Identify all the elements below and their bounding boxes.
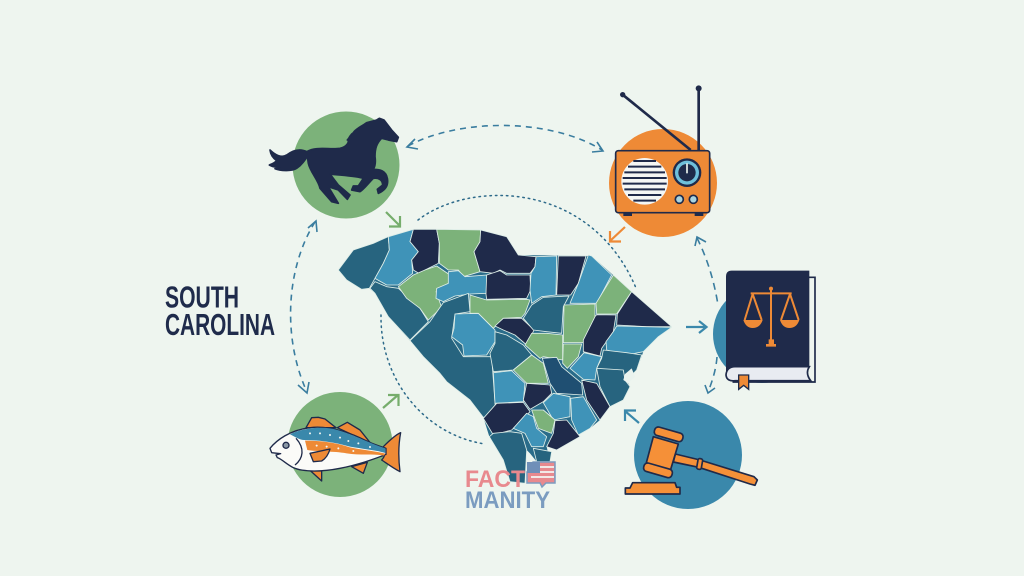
arrow: book to gavel: [705, 357, 717, 393]
dashed cycle arrows: [291, 125, 718, 393]
map: South Carolina counties: [338, 229, 672, 483]
icon: fish on green circle: [270, 392, 401, 497]
dotted ring around the map: [381, 195, 636, 444]
arrow: horse to radio: [407, 125, 603, 152]
icon: law book with scales on blue circle: [713, 271, 815, 389]
logo: Fact Manity watermark: [465, 462, 555, 514]
logo: Fact Manity watermark: FACT: [465, 466, 525, 493]
arrow: map to book: [686, 321, 706, 333]
logo: Fact Manity watermark: MANITY: [465, 487, 550, 514]
icon: horse in green circle: [269, 112, 400, 218]
arrow: radio to map: [610, 227, 625, 242]
title: South Carolina: [165, 280, 275, 342]
arrow: book to radio: [695, 237, 718, 305]
title: South Carolina: CAROLINA: [165, 308, 275, 342]
arrow: horse to map: [386, 212, 400, 226]
icon: radio on orange circle: [609, 85, 717, 237]
arrow: fish to horse: [291, 221, 317, 393]
logo flag bubble: [527, 462, 555, 487]
arrow: gavel to map: [625, 410, 639, 423]
icon: gavel on blue circle: [625, 401, 757, 509]
arrow: map to fish: [383, 395, 398, 408]
title: South Carolina: SOUTH: [165, 280, 239, 314]
